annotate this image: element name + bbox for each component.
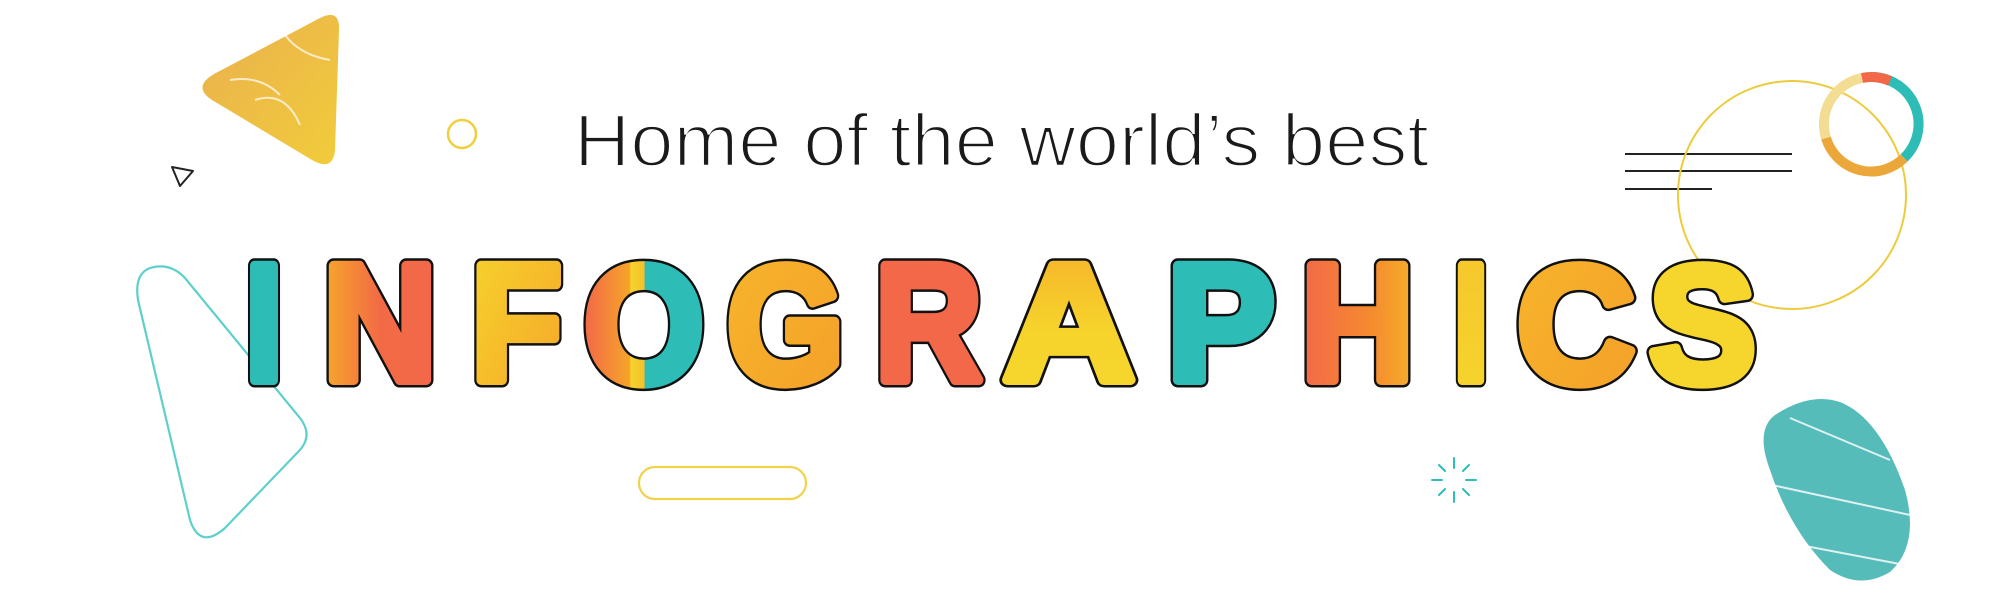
fill layer: A <box>1003 231 1135 416</box>
outline layer: S <box>1649 233 1756 418</box>
icon: teal sparkle <box>1432 458 1476 502</box>
outline layer: C <box>1517 233 1635 418</box>
decorative small triangle outline <box>172 167 193 186</box>
fill layer: F <box>471 231 562 416</box>
outline layer: F <box>471 231 562 416</box>
heading: INFOGRAPHICS <box>245 231 1756 418</box>
fill layer <box>245 231 1756 418</box>
decorative yellow pill <box>639 467 806 499</box>
fill layer: O <box>584 233 704 418</box>
outline layer: A <box>1003 231 1135 416</box>
fill layer: P <box>1167 231 1275 416</box>
decorative teal triangle outline <box>137 266 307 537</box>
outline layer: N <box>323 231 437 416</box>
outline layer <box>245 231 1756 418</box>
fill layer: H <box>1301 231 1414 416</box>
fill layer: R <box>875 231 982 416</box>
outline layer: H <box>1301 231 1414 416</box>
outline layer: I <box>1453 231 1489 416</box>
outline layer: G <box>727 233 844 418</box>
fill layer: S <box>1649 233 1756 418</box>
outline layer: I <box>245 231 283 416</box>
fill layer: I <box>245 231 283 416</box>
fill layer: G <box>727 233 844 418</box>
outline layer: R <box>875 231 982 416</box>
outline layer: O <box>584 233 704 418</box>
decorative yellow circle <box>1678 81 1906 309</box>
decorative orange triangle <box>202 15 339 164</box>
decorative teal blob <box>1764 399 1910 581</box>
icon: donut ring <box>1824 77 1919 172</box>
decorative text lines <box>1625 154 1792 189</box>
fill layer: I <box>1453 231 1489 416</box>
outline layer: P <box>1167 231 1275 416</box>
fill layer: N <box>323 231 437 416</box>
fill layer: C <box>1517 233 1635 418</box>
decorative small yellow circle <box>448 120 476 148</box>
title: Home of the world’s best <box>574 99 1429 182</box>
